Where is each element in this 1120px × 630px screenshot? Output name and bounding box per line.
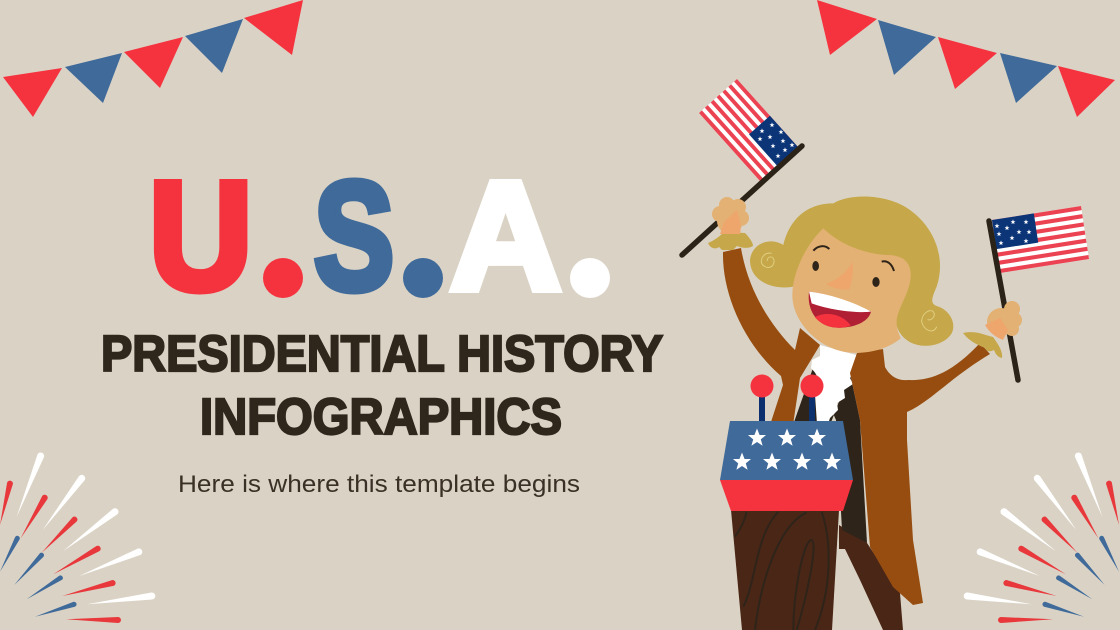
- fireworks: bottom left: [0, 452, 155, 623]
- heading: presidential history infographics: INFOGRAPHICS: [200, 388, 562, 445]
- mouth: [809, 292, 871, 328]
- title: U.S.A.: .: [270, 205, 296, 305]
- bunting: top left: [3, 0, 303, 117]
- title: U.S.A.: U: [149, 149, 252, 322]
- shirt ruffle: [811, 345, 856, 424]
- teeth: [809, 292, 871, 312]
- fireworks: bottom right: [964, 452, 1119, 623]
- right cuff: [963, 332, 1002, 358]
- heading: presidential history infographics: [101, 325, 663, 445]
- title: U.S.A.: .: [410, 205, 436, 305]
- tongue: [815, 314, 851, 328]
- face: [792, 228, 911, 353]
- hair curls: [761, 253, 937, 331]
- title: U.S.A.: .: [577, 205, 603, 305]
- right fist: [985, 301, 1022, 340]
- coat: left sleeve and front: [723, 248, 820, 425]
- title: U.S.A.: A: [450, 150, 561, 322]
- coat: right panel and arm: [850, 343, 990, 605]
- character: presidential figure: [682, 79, 1089, 630]
- left fist: [712, 197, 749, 234]
- hair: [750, 197, 953, 346]
- subtitle text: Here is where this template begins: [178, 471, 580, 498]
- back leg: [839, 525, 903, 630]
- left cuff: [708, 232, 753, 250]
- flag: right: [989, 206, 1089, 380]
- heading: presidential history infographics: PRESIDENTIAL HISTORY: [101, 325, 663, 382]
- dark vest: [793, 368, 867, 543]
- head: [750, 197, 953, 353]
- microphones: [750, 374, 824, 422]
- lectern base: [731, 510, 839, 630]
- left hand with flag: [682, 79, 802, 255]
- right hand with flag: [963, 206, 1089, 380]
- bunting: top right: [817, 0, 1115, 117]
- title: U.S.A.: S: [314, 151, 394, 322]
- lectern top with stars: [720, 421, 853, 511]
- title: U.S.A.: [149, 149, 610, 322]
- nose: [826, 262, 853, 289]
- eyes: [812, 261, 880, 287]
- eyebrows: [813, 246, 894, 271]
- flag: left: [682, 79, 802, 255]
